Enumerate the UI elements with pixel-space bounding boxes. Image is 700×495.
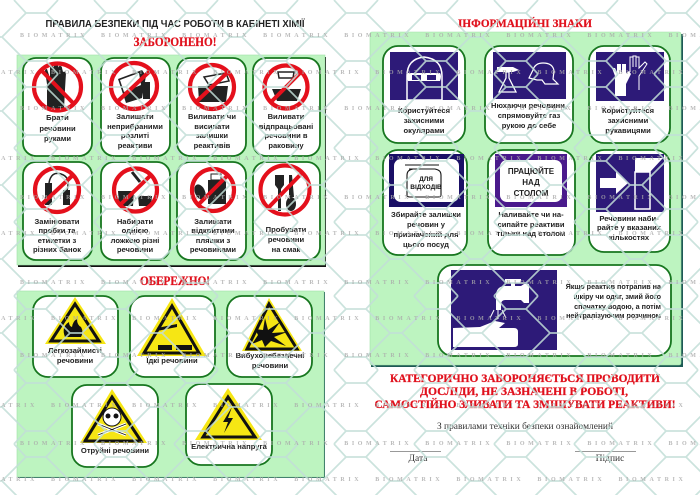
card: washing skin: нейтралізуючим розчином: [566, 311, 661, 320]
card: sink: [253, 58, 320, 156]
card: waste: ДЛЯ: [419, 176, 433, 183]
card: goggles: окулярами: [404, 126, 445, 135]
card: open bottles: відкритими: [191, 226, 235, 235]
card: hand: руками: [44, 134, 71, 143]
card: goggles: [383, 46, 465, 143]
card: work over the table: СТОЛОМ: [514, 189, 549, 198]
card: hand: речовини: [39, 124, 76, 133]
card: work over the table: НАД: [522, 178, 540, 187]
card: swapping stoppers: пробки та: [38, 226, 76, 235]
card: work over the table: [488, 150, 575, 255]
card: sink: речовини в: [264, 131, 308, 140]
card: measured amounts: [589, 150, 670, 252]
card: explosive: Вибухонебезпечні: [236, 351, 304, 360]
card: work over the table: ПРАЦЮЙТЕ: [508, 167, 555, 176]
heading: caution: ОБЕРЕЖНО!: [140, 274, 210, 288]
card: smelling: Нюхаючи речовини,: [491, 101, 567, 110]
card: flammable: [33, 296, 118, 377]
card: measured amounts: Речовини наби-: [599, 214, 659, 223]
card: same spoon: однією: [122, 226, 149, 235]
card: tasting: на смак: [272, 245, 301, 254]
card: smelling: спрямовуйте газ: [498, 111, 561, 120]
card: spilled reagents: реактиви: [118, 141, 153, 150]
signature field: Підпис: [596, 454, 624, 464]
card: goggles: Користуйтеся: [398, 106, 450, 115]
acknowledgement line: З правилами техніки безпеки ознайомлений: [437, 421, 613, 432]
card: measured amounts: райте у вказаних: [597, 223, 662, 232]
card: waste: призначений для: [393, 230, 459, 239]
card: work over the table: сипайте реактиви: [497, 220, 565, 229]
card: electric: Електрична напруга: [191, 442, 268, 451]
card: spilled reagents: Залишати: [116, 112, 154, 121]
card: hand: [23, 58, 92, 156]
warning text: [374, 373, 676, 411]
card: smelling: рукою до себе: [502, 121, 556, 130]
panel: caution: [17, 291, 325, 478]
card: pouring leftovers: Виливати чи: [188, 112, 236, 121]
card: hand: Брати: [46, 113, 69, 122]
card: waste: цього посуд: [403, 240, 449, 249]
card: waste: [383, 150, 467, 255]
card: flammable: Легкозаймисті: [48, 346, 102, 355]
card: toxic: Отруйні речовини: [81, 446, 149, 455]
card: toxic: [72, 385, 158, 467]
card: smelling: [485, 46, 573, 143]
card: swapping stoppers: Замінювати: [35, 217, 80, 226]
card: tasting: речовини: [268, 235, 304, 244]
card: gloves: захисними: [608, 116, 649, 125]
heading: forbidden: ЗАБОРОНЕНО!: [134, 35, 216, 49]
card: same spoon: речовини: [117, 245, 153, 254]
card: swapping stoppers: етикетки з: [38, 236, 76, 245]
date field: [390, 452, 441, 464]
card: explosive: [227, 296, 312, 377]
card: same spoon: ложкою різні: [111, 236, 159, 245]
card: gloves: [589, 46, 670, 143]
card: pouring leftovers: залишки: [196, 131, 228, 140]
signature field: [575, 452, 636, 464]
panel: information signs: [370, 32, 683, 367]
card: sink: Виливати: [268, 112, 305, 121]
card: spilled reagents: розлиті: [121, 131, 149, 140]
card: washing skin: спочатку водою, а потім: [574, 302, 661, 311]
date field: Дата: [409, 454, 428, 464]
warning text: САМОСТІЙНО ЗЛИВАТИ ТА ЗМІШУВАТИ РЕАКТИВИ!: [374, 397, 676, 411]
card: gloves: Користуйтеся: [602, 106, 654, 115]
title: ПРАВИЛА БЕЗПЕКИ ПІД ЧАС РОБОТИ В КАБІНЕТІ ХІМІЇ: [46, 17, 305, 30]
card: measured amounts: кількостях: [609, 233, 650, 242]
card: pouring leftovers: [177, 58, 246, 156]
card: washing skin: Якщо реактив потрапив на: [566, 282, 662, 291]
card: tasting: Пробувати: [266, 225, 307, 234]
card: gloves: рукавицями: [605, 126, 651, 135]
card: spilled reagents: неприбраними: [107, 122, 163, 131]
card: same spoon: [101, 162, 170, 260]
card: waste: ВІДХОДІВ: [410, 184, 442, 191]
card: electric: [186, 384, 272, 465]
heading: information signs: ІНФОРМАЦІЙНІ ЗНАКИ: [458, 16, 593, 30]
card: tasting: [253, 162, 320, 260]
card: washing skin: [438, 265, 671, 356]
card: goggles: захисними: [404, 116, 445, 125]
card: swapping stoppers: [23, 162, 92, 260]
card: pouring leftovers: реактивів: [194, 141, 231, 150]
card: open bottles: Залишати: [194, 217, 232, 226]
card: washing skin: шкіру чи одяг, змий його: [573, 292, 662, 301]
card: open bottles: [177, 162, 246, 260]
warning text: КАТЕГОРИЧНО ЗАБОРОНЯЄТЬСЯ ПРОВОДИТИ: [390, 373, 660, 385]
card: corrosive: [130, 296, 215, 377]
card: waste: Збирайте залишки: [391, 210, 461, 219]
card: pouring leftovers: висипати: [194, 122, 230, 131]
card: swapping stoppers: різних банок: [33, 245, 81, 254]
card: flammable: речовини: [57, 356, 93, 365]
card: sink: відпрацьовані: [259, 122, 313, 131]
panel: forbidden: [17, 55, 326, 267]
warning text: ДОСЛІДИ, НЕ ЗАЗНАЧЕНІ В РОБОТІ,: [420, 386, 628, 398]
card: spilled reagents: [101, 58, 170, 156]
card: work over the table: тільки над столом: [497, 229, 566, 238]
card: sink: раковину: [268, 141, 304, 150]
card: corrosive: Їдкі речовини: [145, 356, 198, 365]
card: waste: речовин у: [407, 220, 446, 229]
card: open bottles: речовинами: [190, 245, 236, 254]
card: open bottles: пляшки з: [196, 236, 230, 245]
card: work over the table: Наливайте чи на-: [498, 210, 564, 219]
card: same spoon: Набирати: [117, 217, 153, 226]
card: explosive: речовини: [252, 361, 288, 370]
